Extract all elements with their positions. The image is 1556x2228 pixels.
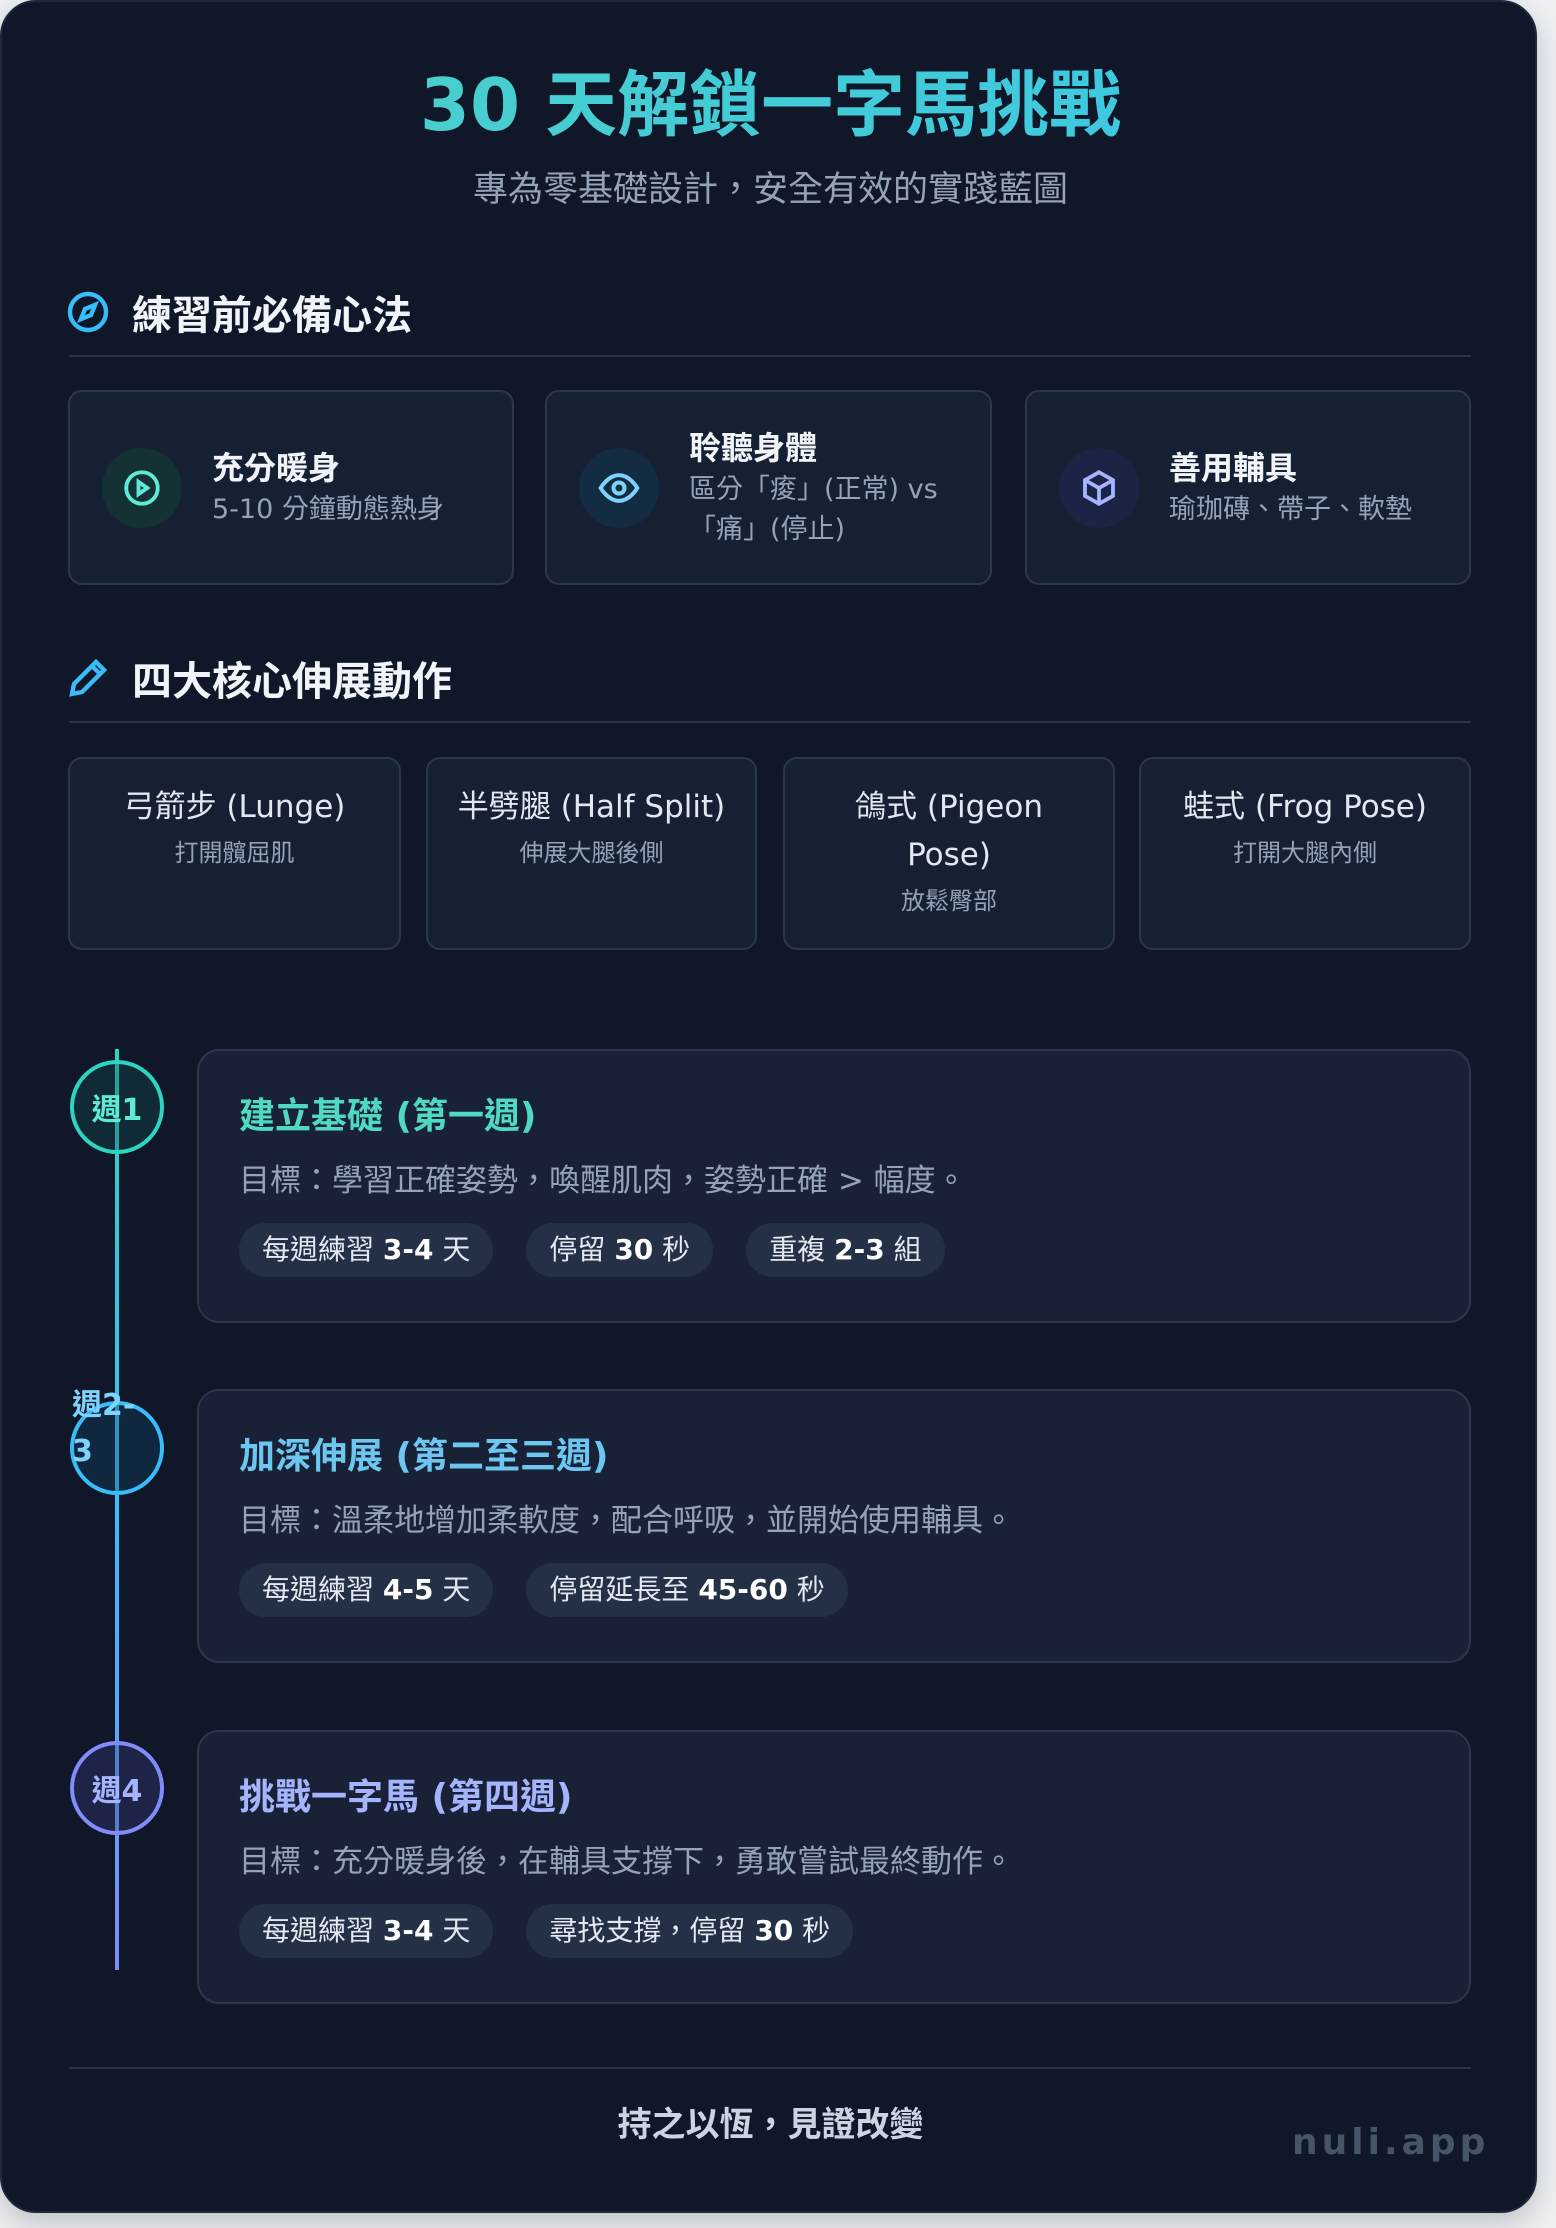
heading: stretches: 四大核心伸展動作	[132, 659, 452, 705]
panel: half split: 伸展大腿後側	[520, 839, 664, 867]
week 4 card: 尋找支撐，停留 30 秒	[549, 1914, 830, 1947]
panel: frog: 打開大腿內側	[1233, 839, 1377, 867]
panel: frog: 蛙式 (Frog Pose)	[1183, 789, 1427, 825]
panel: props: 瑜珈磚、帶子、軟墊	[1169, 494, 1412, 524]
panel: pigeon	[783, 757, 1115, 950]
week 1 card: 重複 2-3 組	[769, 1233, 922, 1266]
icon: compass	[68, 292, 108, 332]
week 1 card: 停留 30 秒	[549, 1233, 690, 1266]
panel: half split	[426, 757, 757, 950]
week 1 card	[197, 1049, 1471, 1323]
week 2-3 circle: 3	[72, 1434, 93, 1469]
week 2-3 card: 加深伸展 (第二至三週)	[239, 1436, 608, 1477]
week 4 card: 目標：充分暖身後，在輔具支撐下，勇敢嘗試最終動作。	[239, 1844, 1014, 1880]
panel: warm up: 充分暖身	[212, 448, 340, 486]
panel: listen to body	[545, 390, 992, 585]
icon: eye	[579, 448, 659, 528]
week 2-3 card: 停留延長至 45-60 秒	[549, 1573, 825, 1606]
week 1 circle: 週1	[92, 1093, 142, 1128]
week 1 card: 每週練習 3-4 天	[262, 1233, 470, 1266]
week 1 circle	[70, 1060, 164, 1154]
week 2-3 card: 每週練習 4-5 天	[262, 1573, 470, 1606]
week 4 card	[197, 1730, 1471, 2004]
panel: props	[1025, 390, 1471, 585]
panel: pigeon: 放鬆臀部	[901, 887, 997, 915]
week 4 card: 每週練習 3-4 天	[262, 1914, 470, 1947]
panel: pigeon: 鴿式 (Pigeon	[855, 789, 1043, 825]
week 2-3 card: 目標：溫柔地增加柔軟度，配合呼吸，並開始使用輔具。	[239, 1503, 1014, 1539]
panel: props: 善用輔具	[1169, 448, 1297, 486]
week 1 card: 目標：學習正確姿勢，喚醒肌肉，姿勢正確 > 幅度。	[239, 1163, 967, 1199]
panel: lunge: 打開髖屈肌	[174, 839, 294, 867]
subtitle: 專為零基礎設計，安全有效的實踐藍圖	[473, 170, 1068, 210]
icon: pencil	[69, 659, 107, 697]
footer slogan: 持之以恆，見證改變	[618, 2105, 924, 2145]
panel: listen to body: 區分「痠」(正常) vs	[689, 474, 938, 504]
icon: play	[102, 448, 182, 528]
week 2-3 circle: 週2-	[72, 1388, 135, 1423]
timeline line	[115, 1049, 119, 1970]
icon: box	[1059, 448, 1139, 528]
heading: preparation: 練習前必備心法	[132, 293, 412, 339]
panel: listen to body: 「痛」(停止)	[689, 514, 845, 544]
panel: half split: 半劈腿 (Half Split)	[458, 789, 725, 825]
week 2-3 card	[197, 1389, 1471, 1663]
panel: warm up: 5-10 分鐘動態熱身	[212, 494, 444, 524]
panel: warm up	[68, 390, 514, 585]
week 1 card: 建立基礎 (第一週)	[239, 1096, 536, 1137]
brand: nuli.app	[1292, 2122, 1489, 2163]
week 4 circle	[70, 1741, 164, 1835]
title: 30 天解鎖一字馬挑戰	[420, 63, 1121, 147]
week 4 card: 挑戰一字馬 (第四週)	[239, 1777, 572, 1818]
panel: listen to body: 聆聽身體	[689, 428, 817, 466]
panel: frog	[1139, 757, 1471, 950]
panel: lunge: 弓箭步 (Lunge)	[124, 789, 345, 825]
week 4 circle: 週4	[92, 1774, 142, 1809]
panel: lunge	[68, 757, 401, 950]
title	[2, 60, 1539, 150]
week 2-3 circle	[70, 1401, 164, 1495]
panel: pigeon: Pose)	[907, 837, 991, 873]
